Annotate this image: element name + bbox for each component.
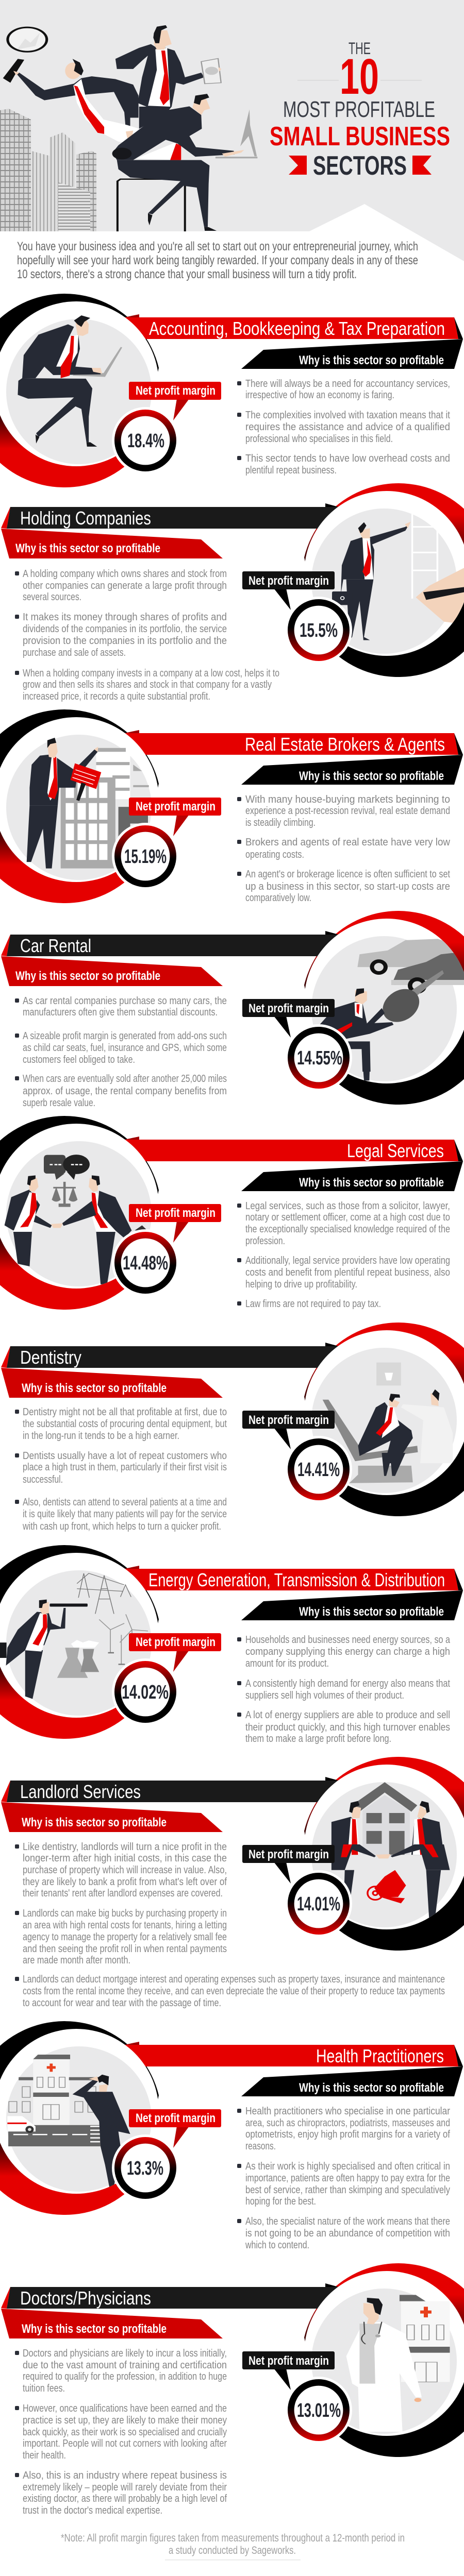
bullet list: irrespective of how an economy is faring. [245, 389, 394, 401]
bullet list [15, 1406, 227, 1532]
bullet list: comparatively low. [245, 892, 311, 904]
bullet list: Dentistry might not be all that profitable at first, due to [23, 1406, 227, 1418]
bullet list: tuition fees. [23, 2383, 65, 2394]
bullet list: requires the assistance and advice of a qualified [245, 421, 450, 433]
callout label: Net profit margin [248, 1002, 329, 1015]
bullet list: Also, dentists can attend to several patients at a time and [23, 1497, 227, 1508]
bullet list: Also, this is an industry where repeat business is [23, 2470, 227, 2481]
swoosh and header band [0, 294, 463, 487]
bullet list: up a business in this sector, so start-up costs are [245, 881, 450, 892]
swoosh and header band [1, 483, 464, 677]
magnifying glass [3, 27, 47, 83]
margin figure: 18.4% [127, 430, 164, 452]
bullet list: extremely likely – people will rarely deviate from their [23, 2482, 227, 2493]
bullet list: trust in the doctor's medical expertise. [23, 2505, 162, 2516]
bullet list: an area with high rental costs for tenants, hiring a letting [23, 1920, 227, 1931]
title line: sectors: SECTORS [313, 151, 407, 181]
seated businessman at computer [112, 94, 257, 231]
callout label: Net profit margin [136, 1206, 216, 1220]
callout label: Net profit margin [136, 384, 216, 398]
subheading: Why is this sector so profitable [22, 1816, 167, 1829]
bullet list: provision to the companies in its portfolio and the [23, 635, 227, 647]
bullet list: plentiful repeat business. [245, 465, 337, 476]
callout label: Net profit margin [248, 574, 329, 588]
title [270, 39, 450, 181]
bullet list [237, 2106, 450, 2251]
bullet list: are made month after month. [23, 1955, 130, 1966]
bullet list: professional who specialises in this field. [245, 433, 393, 445]
bullet list [237, 794, 451, 904]
bullet list: back quickly, as their work is so specialised and crucially [23, 2427, 227, 2438]
bullet list: customers feel obliged to take. [23, 1054, 135, 1065]
bullet list: required to qualify for the profession, in addition to huge [23, 2371, 227, 2382]
heading: Dentistry [20, 1347, 81, 1368]
callout label: Net profit margin [248, 1848, 329, 1861]
net profit margin callout [242, 2351, 352, 2444]
bullet list: Landlords can make big bucks by purchasing property in [23, 1908, 227, 1919]
bullet list: several sources. [23, 591, 81, 603]
bullet list: the substantial costs of procuring dental equipment, but [23, 1418, 227, 1430]
illustration: man pointing at ladder with drawing hand [332, 514, 464, 640]
bullet list [237, 378, 450, 476]
bullet list: longer-term after high initial costs, in this case the [23, 1853, 227, 1864]
panel: Legal Services [0, 1116, 463, 1310]
bullet list: approx. of usage, the rental company benefits from [23, 1086, 227, 1097]
bullet list: operating costs. [245, 849, 304, 860]
net profit margin callout [242, 999, 352, 1091]
bullet list: purchase and sale of assets. [23, 647, 126, 658]
bullet list: purchase of property which will increase in value. Also, [23, 1865, 227, 1876]
bullet list [15, 1841, 445, 2009]
bullet list: increased price, it records a quite substantial profit. [23, 691, 210, 702]
net profit margin callout [112, 798, 221, 890]
bullet list: place a high trust in them, particularly if their first visit is [23, 1462, 227, 1473]
bullet list: existing doctor, as there will probably be a high level of [23, 2493, 227, 2504]
swoosh and header band [1, 1323, 464, 1516]
bullet list: A sizeable profit margin is generated from add-ons such [23, 1030, 227, 1042]
swoosh and header band [1, 911, 464, 1105]
panel: Real Estate Brokers & Agents [0, 709, 463, 904]
bullet list: helping to drive up profitability. [245, 1279, 357, 1290]
bullet list [237, 1634, 451, 1744]
net profit margin callout [112, 382, 221, 474]
bullet list [15, 995, 227, 1109]
bullet list: superb resale value. [23, 1097, 95, 1109]
intro text [17, 240, 418, 281]
margin figure: 14.41% [297, 1459, 340, 1481]
net profit margin callout [112, 1204, 221, 1296]
bullet list: Brokers and agents of real estate have very low [245, 837, 451, 848]
bullet list [237, 1200, 450, 1310]
bullet list: they are likely to bank a profit from what's left over of [23, 1876, 227, 1888]
bullet list: which to contend. [245, 2240, 309, 2251]
subheading: Why is this sector so profitable [15, 541, 160, 555]
callout label: Net profit margin [248, 2354, 329, 2368]
bullet list: agency to manage the property for a relatively small fee [23, 1931, 227, 1943]
illustration: landlords shaking hands before a house [332, 1782, 450, 1919]
hero background [0, 0, 464, 261]
ribbon left [289, 156, 307, 175]
illustration: agent with sold sign and building [27, 738, 149, 869]
bullet list: When a holding company invests in a company at a low cost, helps it to [23, 668, 279, 679]
bullet list: Doctors and physicians are likely to incur a loss initially, [23, 2348, 227, 2359]
bullet list: is steadily climbing. [245, 817, 316, 828]
bullet list: and then seeing the profit roll in when rental payments [23, 1943, 227, 1955]
panel: Doctors/Physicians [1, 2263, 464, 2516]
illustration: man carrying key with cars [320, 939, 464, 1080]
bullet list: profession. [245, 1235, 285, 1247]
panel: Holding Companies [1, 483, 464, 702]
intro text: 10 sectors, there's a strong chance that your small business will turn a tidy profit. [17, 267, 357, 281]
bullet list: as child car seats, fuel, insurance and GPS, which some [23, 1042, 227, 1054]
bullet list: suppliers sell high volumes of their product. [245, 1690, 404, 1701]
heading: Landlord Services [20, 1781, 141, 1802]
illustration: doctor before hospital [346, 2295, 450, 2432]
subheading: Why is this sector so profitable [22, 1381, 167, 1395]
panel: Dentistry [1, 1323, 464, 1532]
bullet list: However, once qualifications have been earned and the [23, 2403, 227, 2414]
net profit margin callout [242, 1845, 352, 1937]
bullet list: When cars are eventually sold after another 25,000 miles [23, 1073, 227, 1084]
bullet list: it is quite likely that many patients will pay for the service [23, 1509, 227, 1520]
illustration: dentist with patient [323, 1363, 453, 1483]
margin figure: 14.02% [122, 1682, 169, 1703]
footnote: a study conducted by Sageworks. [169, 2545, 296, 2556]
panel: Car Rental [1, 911, 464, 1109]
margin figure: 14.48% [123, 1252, 168, 1274]
bullet list: their health. [23, 2450, 66, 2461]
swoosh and header band [0, 2021, 463, 2215]
margin figure: 15.19% [124, 846, 167, 868]
panel: Landlord Services [1, 1757, 464, 2009]
callout label: Net profit margin [136, 2111, 216, 2125]
heading: Car Rental [20, 935, 91, 956]
illustration: man with telescope and power infrastructure [0, 1573, 148, 1699]
panel: Accounting, Bookkeeping & Tax Preparation [0, 294, 463, 487]
bullet list: important. People will not cut corners with looking after [23, 2438, 227, 2449]
bullet list: A holding company which owns shares and stock from [23, 568, 227, 580]
top businessman [115, 25, 221, 129]
footnote [61, 2532, 405, 2556]
margin figure: 13.01% [297, 2400, 341, 2421]
margin figure: 14.01% [297, 1893, 340, 1915]
bullet list: Like dentistry, landlords will turn a nice profit in the [23, 1841, 227, 1853]
bullet list: successful. [23, 1474, 63, 1485]
bullet list [15, 568, 279, 702]
bullet list: other companies can generate a large profit through [23, 580, 227, 591]
net profit margin callout [242, 1411, 352, 1503]
swoosh and header band [0, 1116, 463, 1310]
swoosh and header band [0, 709, 463, 903]
bullet list: dividends of the companies in its portfolio, the service [23, 623, 227, 635]
bullet list: Dentists usually have a lot of repeat customers who [23, 1450, 227, 1462]
panel: Health Practitioners [0, 2021, 463, 2251]
net profit margin callout [242, 571, 352, 664]
callout label: Net profit margin [248, 1413, 329, 1427]
heading: Doctors/Physicians [20, 2287, 151, 2309]
swoosh and header band [0, 1545, 463, 1739]
bullet list: them to make a large profit before long. [245, 1733, 391, 1744]
subheading: Why is this sector so profitable [22, 2322, 167, 2336]
margin figure: 13.3% [127, 2158, 163, 2179]
bullet list: practice is set up, they are likely to make their money [23, 2415, 227, 2426]
hero illustration: city buildings [0, 109, 96, 231]
bullet list: their tenants' rent after landlord expenses are covered. [23, 1888, 223, 1899]
net profit margin callout [112, 2109, 221, 2201]
heading: Holding Companies [20, 507, 151, 529]
bullet list: to account for wear and tear with the passage of time. [23, 1997, 221, 2009]
subheading: Why is this sector so profitable [15, 969, 160, 983]
bullet list: hoping for the best. [245, 2196, 316, 2207]
bullet list: manufacturers often give them substantial discounts. [23, 1007, 218, 1018]
bullet list [15, 2348, 227, 2516]
bullet list: due to the vast amount of training and certification [23, 2360, 227, 2371]
bullet list: With many house-buying markets beginning to [245, 794, 450, 805]
margin figure: 15.5% [300, 620, 338, 641]
callout label: Net profit margin [136, 1635, 216, 1649]
bullet list: As car rental companies purchase so many cars, the [23, 995, 227, 1007]
bullet list: with cash up front, which helps to turn a quicker profit. [22, 1521, 221, 1532]
ribbon right [412, 156, 432, 175]
bullet list: reasons. [245, 2141, 276, 2152]
left businessman [13, 59, 139, 143]
bullet list: grow and then sells its shares and stock in that company for a vastly [23, 679, 272, 690]
panel: Energy Generation, Transmission & Distribution [0, 1545, 463, 1744]
bullet list: amount for its product. [245, 1658, 329, 1669]
callout label: Net profit margin [136, 800, 216, 814]
swoosh and header band [1, 2263, 464, 2457]
margin figure: 14.55% [297, 1047, 342, 1069]
illustration: man with laptop [18, 315, 122, 447]
bullet list: It makes its money through shares of profits and [23, 612, 227, 623]
swoosh and header band [1, 1757, 464, 1951]
title number: 10: 10 [340, 48, 379, 105]
illustration: lawyers shaking hands with scales [5, 1155, 147, 1284]
illustration: man viewing hospital [7, 2055, 130, 2188]
net profit margin callout [112, 1633, 221, 1725]
hero illustration: three businessmen [3, 25, 257, 231]
title line: THE: THE [349, 39, 371, 58]
bullet list: in the long-run it tends to be a high earner. [23, 1430, 179, 1442]
bullet list: Law firms are not required to pay tax. [245, 1298, 381, 1310]
